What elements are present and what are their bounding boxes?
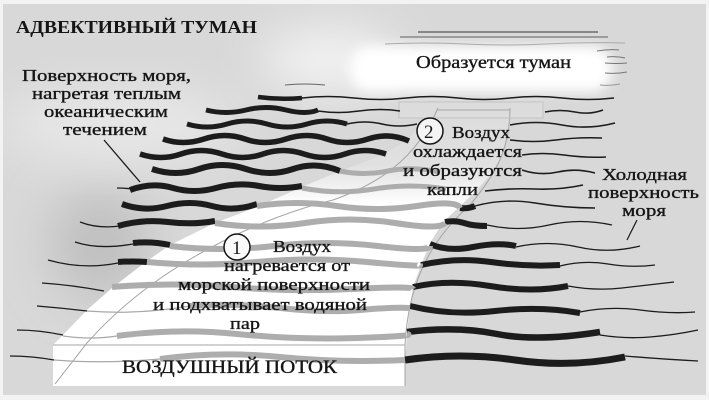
title: АДВЕКТИВНЫЙ ТУМАН — [16, 16, 257, 37]
flow outline — [53, 102, 543, 386]
cold sea surface: thin dark waves — [10, 96, 698, 361]
step 2 text: капли — [427, 180, 478, 199]
warm air flow — [53, 102, 543, 386]
step 1 text: Воздух — [273, 237, 332, 256]
waves seen through the air flow: grey — [112, 169, 460, 361]
leader line: cold sea — [627, 220, 637, 240]
faint waves at flow edge — [54, 306, 190, 362]
step 1 callout — [153, 234, 370, 333]
step 2 number: 2 — [424, 122, 434, 143]
label: warm sea surface: нагретая теплым — [32, 84, 181, 103]
leader line: warm sea — [104, 140, 140, 182]
step 2 text: Воздух — [452, 123, 511, 142]
step 1 text: пар — [230, 314, 260, 333]
step 2 callout — [403, 118, 522, 199]
label: warm sea surface: течением — [63, 120, 147, 139]
label: air stream: ВОЗДУШНЫЙ ПОТОК — [122, 357, 337, 378]
step 1 text: нагревается от — [224, 256, 351, 275]
label: warm sea surface: Поверхность моря, — [22, 66, 191, 85]
step 1 text: морской поверхности — [178, 275, 370, 294]
step 2 text: и образуются — [403, 161, 522, 180]
step 1 number — [224, 234, 250, 260]
step 2 text: охлаждается — [413, 142, 522, 161]
warm sea surface: thick dark waves — [118, 97, 625, 363]
step 1 text — [153, 237, 370, 333]
label: warm sea surface — [22, 66, 191, 139]
fog cloud — [350, 46, 612, 92]
label: warm sea surface: океаническим — [44, 102, 168, 121]
label: cold sea surface: Холодная — [602, 165, 687, 184]
step 1 text: и подхватывает водяной — [153, 295, 367, 314]
label: fog forms: Образуется туман — [416, 52, 571, 72]
fog wisps — [285, 32, 627, 85]
step 1 number: 1 — [232, 238, 242, 259]
label: cold sea surface: моря — [622, 201, 666, 220]
label: cold sea surface — [588, 165, 699, 220]
step 2 text — [403, 123, 522, 199]
label: cold sea surface: поверхность — [588, 183, 699, 202]
